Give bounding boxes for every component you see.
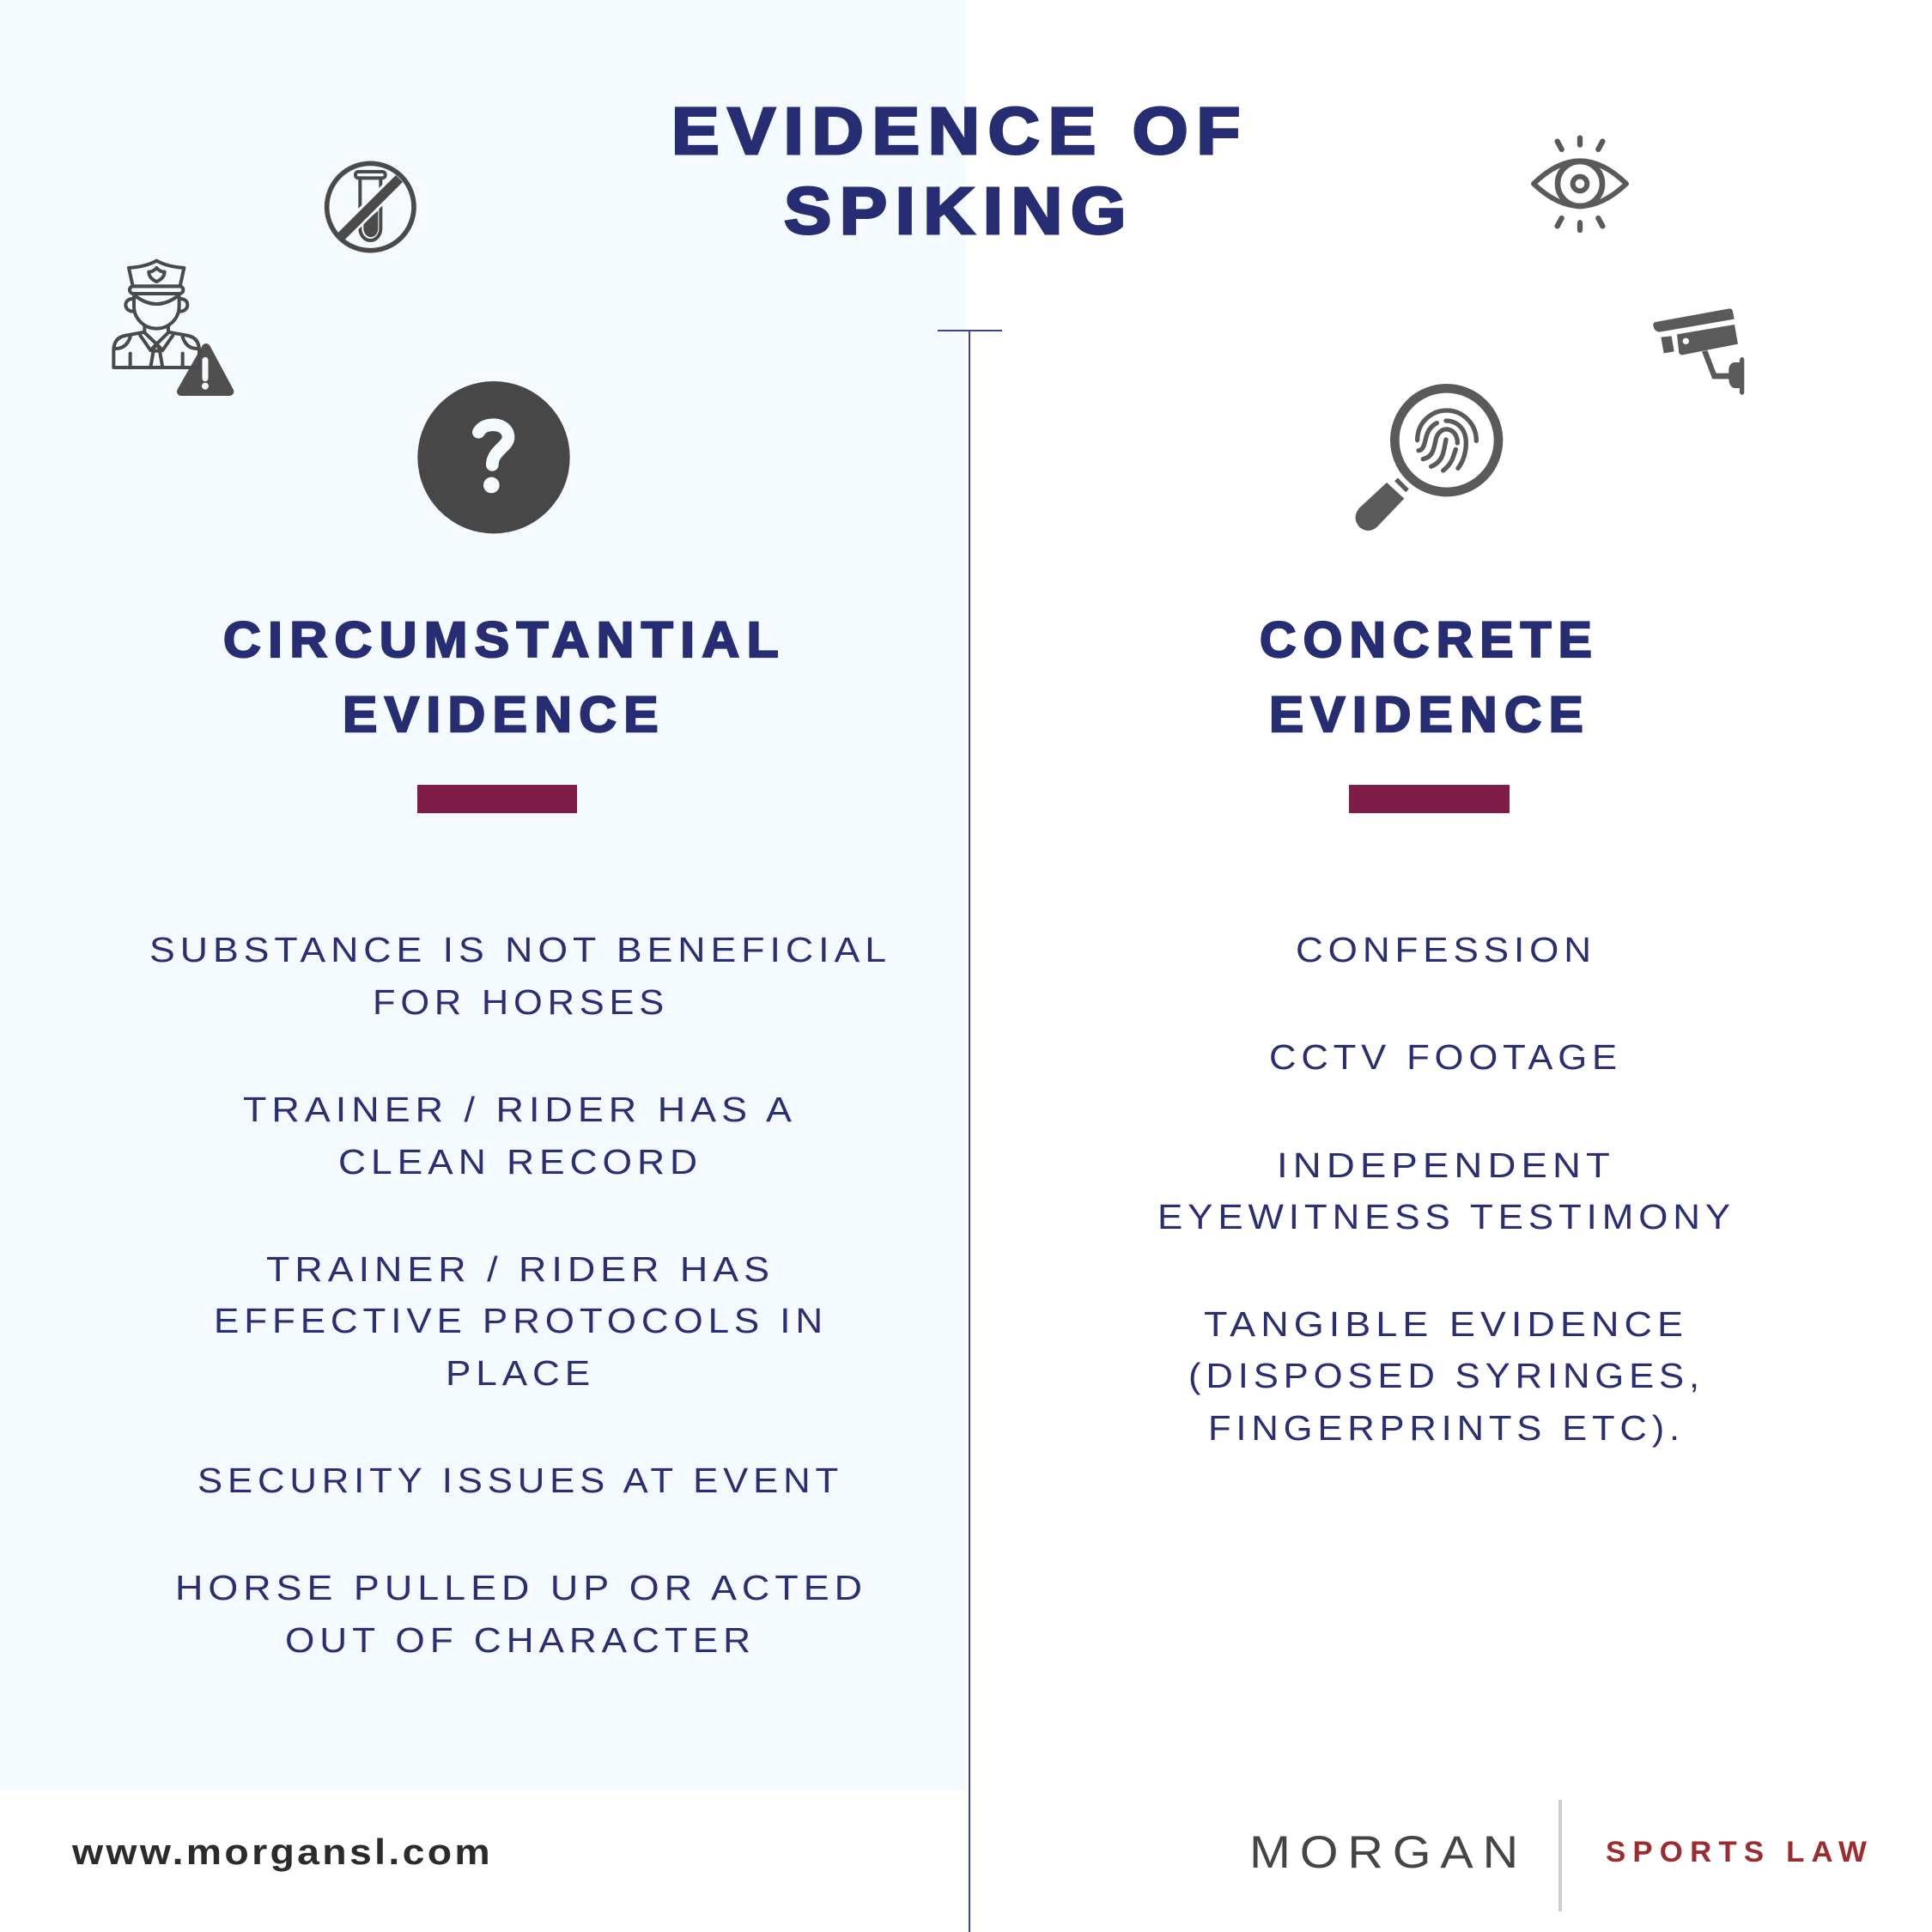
text block: circumstantial list: OUT OF CHARACTER	[285, 1620, 756, 1660]
text block: concrete list: FINGERPRINTS ETC).	[1208, 1408, 1685, 1448]
text block: concrete list: TANGIBLE EVIDENCE	[1204, 1304, 1688, 1344]
logo: morgan: MORGAN	[1249, 1827, 1528, 1878]
footer: website: www.morgansl.com	[71, 1832, 493, 1872]
heading: circumstantial evidence: EVIDENCE	[343, 687, 665, 743]
text block: circumstantial list: SECURITY ISSUES AT EVENT	[197, 1461, 843, 1500]
text block: concrete list: CONFESSION	[1296, 930, 1596, 969]
text block: circumstantial list: HORSE PULLED UP OR ACTED	[175, 1568, 867, 1607]
cap badge	[149, 268, 165, 282]
icon: magnifier with fingerprint	[1355, 388, 1498, 531]
text block: concrete list: (DISPOSED SYRINGES,	[1188, 1356, 1704, 1395]
text block: circumstantial list	[149, 930, 891, 1660]
icon: police officer with warning	[113, 261, 229, 392]
heading: concrete evidence	[1260, 612, 1599, 743]
divider: vertical line	[938, 331, 1002, 1932]
text block: circumstantial list: FOR HORSES	[373, 982, 669, 1022]
heading: circumstantial evidence: CIRCUMSTANTIAL	[223, 612, 786, 668]
text block: circumstantial list: CLEAN RECORD	[338, 1142, 702, 1182]
footer: logo	[1249, 1800, 1874, 1911]
heading: concrete evidence: CONCRETE	[1260, 612, 1599, 668]
text block: circumstantial list: EFFECTIVE PROTOCOLS IN	[214, 1301, 828, 1340]
icon: prohibited test tube	[327, 163, 414, 251]
heading: concrete evidence: EVIDENCE	[1269, 687, 1590, 743]
title: SPIKING	[784, 174, 1134, 248]
logo: sports law: SPORTS LAW	[1606, 1836, 1874, 1868]
icon: question mark circle	[417, 381, 570, 533]
text block: concrete list: EYEWITNESS TESTIMONY	[1157, 1197, 1735, 1236]
text block: circumstantial list: PLACE	[446, 1353, 595, 1393]
panel: left background	[0, 0, 966, 1790]
text block: concrete list	[1157, 930, 1735, 1448]
officer face	[134, 295, 179, 329]
text block: circumstantial list: SUBSTANCE IS NOT BENEFICIAL	[149, 930, 891, 969]
text block: concrete list: INDEPENDENT	[1277, 1145, 1615, 1185]
icon: eye	[1534, 138, 1626, 230]
heading: circumstantial evidence	[223, 612, 786, 743]
officer uniform	[113, 326, 199, 368]
text block: circumstantial list: TRAINER / RIDER HAS	[266, 1249, 775, 1289]
fingerprint ridges	[1418, 410, 1476, 440]
title: EVIDENCE OF	[671, 94, 1249, 168]
text block: concrete list: CCTV FOOTAGE	[1269, 1037, 1622, 1077]
accent bar: right	[1349, 785, 1510, 813]
logo: divider	[1558, 1800, 1562, 1911]
text block: circumstantial list: TRAINER / RIDER HAS A	[243, 1090, 797, 1129]
officer cap	[129, 261, 184, 286]
warning triangle	[181, 348, 229, 392]
accent bar: left	[417, 785, 577, 813]
icon: CCTV camera	[1653, 308, 1744, 395]
title	[671, 94, 1249, 248]
